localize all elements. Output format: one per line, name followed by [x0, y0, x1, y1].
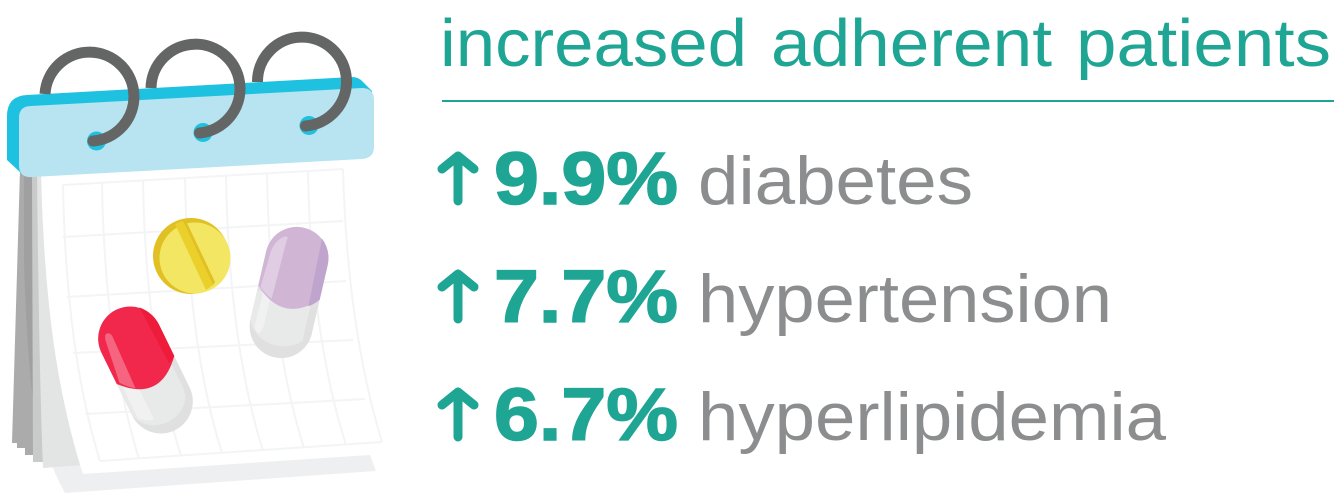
value: 9.9%: [494, 137, 678, 220]
stat row: hyperlipidemia: [442, 373, 1166, 456]
page shadow band: [43, 440, 376, 493]
binding front: [19, 88, 374, 177]
purple capsule: [243, 221, 335, 364]
calendar grid: [63, 169, 382, 461]
stat row: diabetes: [442, 137, 973, 220]
curled page edge: [37, 170, 84, 468]
icon: calendar with pills: [7, 37, 388, 493]
value: 6.7%: [494, 373, 678, 456]
title: increased: [440, 6, 747, 81]
stat row: hypertension: [442, 255, 1112, 338]
title: patients: [1076, 6, 1331, 81]
icon: up arrow: [442, 274, 474, 319]
title: [440, 6, 1331, 81]
label: diabetes: [698, 143, 973, 219]
binding back edge: [7, 77, 372, 174]
icon: up arrow: [442, 392, 474, 437]
icon: up arrow: [442, 156, 474, 201]
red capsule: [87, 296, 204, 444]
binding holes: [87, 116, 318, 150]
value: 7.7%: [494, 255, 678, 338]
label: hypertension: [698, 261, 1112, 337]
title rule: [442, 100, 1334, 102]
spiral rings: [45, 37, 346, 146]
calendar back pages: [12, 170, 43, 462]
yellow pill: [153, 218, 230, 296]
label: hyperlipidemia: [698, 379, 1166, 455]
title: adherent: [771, 6, 1052, 81]
calendar page: [41, 160, 388, 474]
